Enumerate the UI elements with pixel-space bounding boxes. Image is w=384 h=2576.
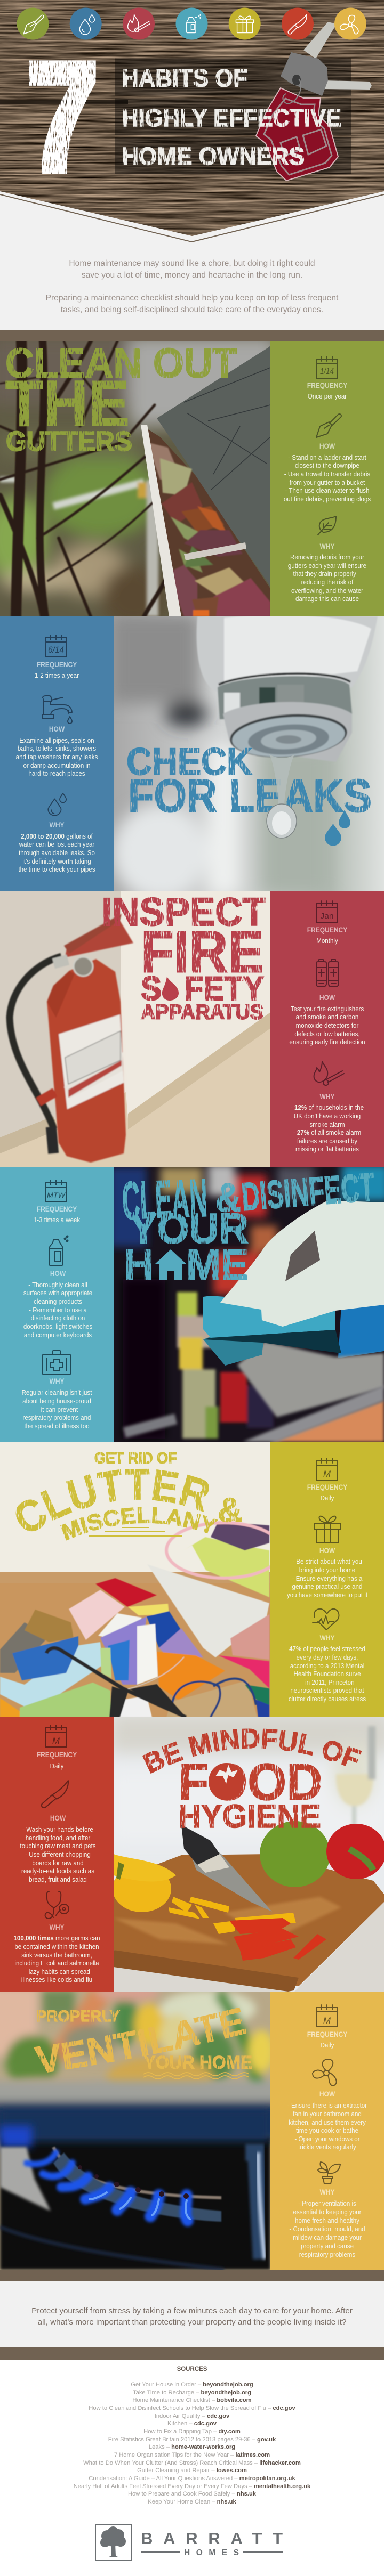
icon: calendar M [45, 1725, 67, 1748]
text: how [287, 1557, 367, 1599]
label: how: HOW [319, 2090, 335, 2098]
sources list: Condensation: A Guide – All Your Questions Answered – metropolitan.org.uk [89, 2475, 295, 2482]
text: why: Health Foundation surve [293, 1670, 361, 1678]
title text [122, 64, 341, 170]
title: get rid of clutter and miscellany: & [218, 1491, 242, 1529]
photo: pile of clutter [0, 1442, 282, 1717]
icon: flame and match [314, 1061, 345, 1086]
text: how: disinfecting cloth on [31, 1314, 85, 1322]
text: how: or damp accumulation in [23, 761, 91, 769]
closing text: all, what’s more important than protecting your property and the people living inside it? [38, 2318, 346, 2327]
text: how: and tap washers for any leaks [16, 753, 98, 761]
icon: knife [41, 1780, 69, 1808]
icon: knife [282, 7, 314, 39]
icon: potted plant [317, 2161, 341, 2184]
text: why: gutters each year will ensure [288, 562, 366, 570]
logo wordmark: BARRATT [141, 2529, 283, 2548]
divider strip [0, 330, 384, 341]
title text: HABITS OF [122, 64, 247, 92]
text: why [13, 1934, 100, 1984]
text: frequency value: 1-3 times a week [34, 1216, 80, 1224]
big numeral 7: 7 [27, 31, 98, 203]
icon: tap [42, 695, 73, 724]
text: how: surfaces with appropriate [23, 1289, 92, 1297]
text: why: - 27% of all smoke alarm [293, 1128, 361, 1136]
intro text: tasks, and being self-disciplined should take care of the everyday ones. [61, 305, 323, 314]
text: why: water can be lost each year [19, 840, 94, 848]
text: why: sink versus the bathroom, [21, 1951, 92, 1959]
text: why: including E coli and salmonella [14, 1959, 99, 1967]
text: why: be contained within the kitchen [14, 1943, 99, 1951]
label: frequency: FREQUENCY [307, 2030, 347, 2038]
label: how: HOW [319, 994, 335, 1002]
text: why: 47% of people feel stressed [289, 1645, 365, 1653]
text: how: hard-to-reach places [28, 769, 85, 777]
text: how [284, 453, 371, 503]
title: be mindful of food hygiene: BE MINDFUL OF [142, 1728, 362, 1774]
text: how: time you cook or bathe [296, 2126, 358, 2134]
sources list: 7 Home Organisation Tips for the New Year – latimes.com [114, 2452, 270, 2458]
sources list: Indoor Air Quality – cdc.gov [155, 2413, 229, 2419]
text: why: Removing debris from your [290, 553, 364, 561]
title: be mindful of food hygiene: FOOD [178, 1753, 323, 1811]
text: why: 100,000 times more germs can [13, 1934, 100, 1942]
title text: HOME OWNERS [122, 142, 305, 170]
label: frequency: FREQUENCY [307, 1483, 347, 1491]
logo: Barratt Homes [94, 2523, 285, 2562]
icon: first aid kit [42, 1350, 71, 1375]
sources list: Leaks – home-water-works.org [149, 2444, 235, 2450]
panel: gutters facts [270, 341, 384, 616]
text: why: - 12% of households in the [291, 1103, 364, 1111]
text: how [289, 1005, 365, 1046]
text: why: smoke alarm [309, 1120, 345, 1128]
icon: spray bottle [49, 1235, 68, 1266]
text: how: genuine practical use and [292, 1582, 362, 1590]
title: inspect fire safety apparatus: SAFETY [141, 970, 264, 1007]
title: clean and disinfect your home: & [215, 1175, 241, 1221]
text: why: that they drain properly – [293, 570, 361, 578]
section 1: clean out the gutters [0, 341, 384, 616]
label: how: HOW [319, 1546, 335, 1555]
icon: fan [311, 2058, 338, 2087]
text: how [16, 736, 98, 777]
photo: pan on gas burner [0, 1984, 283, 2270]
label: frequency: FREQUENCY [37, 1205, 77, 1213]
text: why: it’s definitely worth taking [22, 857, 91, 865]
icon: batteries [316, 959, 339, 987]
closing band [0, 2270, 384, 2360]
title: get rid of clutter and miscellany: CLUTTER [16, 1468, 209, 1531]
icon: spray bottle [176, 7, 208, 39]
text: why: according to a 2013 Mental [290, 1661, 364, 1670]
text: why: - Condensation, mould, and [289, 2225, 365, 2233]
photo: dripping tap [109, 613, 384, 900]
text: why: - Proper ventilation is [298, 2199, 356, 2207]
section 2: check for leaks [0, 616, 384, 891]
text: how: Test your fire extinguishers [291, 1005, 364, 1013]
sources heading: SOURCES [177, 2366, 207, 2372]
label: how: HOW [49, 725, 65, 733]
icon: calendar M: M [323, 1468, 331, 1479]
habit icon row [17, 7, 366, 39]
text: how: and computer keyboards [24, 1331, 92, 1339]
icon: trowel [316, 413, 342, 438]
text: how: - Ensure everything has a [292, 1574, 362, 1582]
title: inspect fire safety apparatus: APPARATUS [141, 1001, 263, 1024]
sources list: Keep Your Home Clean – nhs.uk [148, 2499, 236, 2505]
title: clean and disinfect your home: HOME [124, 1241, 249, 1289]
label: why: WHY [319, 542, 335, 550]
title text: HIGHLY EFFECTIVE [122, 104, 341, 132]
text: why [289, 1645, 366, 1703]
icon: calendar 1/14: 1/14 [320, 365, 334, 376]
panel: cleaning facts [0, 1167, 114, 1442]
text: how: out fine debris, preventing clogs [284, 495, 371, 503]
icon: fan [334, 7, 366, 39]
section 4: clean and disinfect [0, 1167, 384, 1442]
logo wordmark [141, 2529, 283, 2557]
text: frequency value: Daily [50, 1762, 63, 1770]
sources list: Fire Statistics Great Britain 2012 to 2013 pages 29-36 – gov.uk [108, 2436, 276, 2443]
page background band [0, 181, 384, 330]
label: why: WHY [49, 821, 65, 829]
sources list [0, 2381, 384, 2506]
title: inspect fire safety apparatus [101, 890, 266, 1024]
label: frequency: FREQUENCY [307, 926, 347, 934]
icon: calendar M: M [323, 2016, 331, 2026]
label: frequency: FREQUENCY [307, 381, 347, 389]
title: properly ventilate your home: YOUR HOME [144, 2052, 252, 2073]
title: check for leaks: CHECK [126, 741, 252, 783]
text: why: missing or flat batteries [295, 1145, 359, 1153]
icon: calendar MTW [45, 1180, 67, 1202]
section 5: clutter [0, 1442, 384, 1717]
logo wordmark: HOMES [184, 2548, 239, 2557]
text: why: overflowing, and the water [291, 587, 363, 595]
icon: calendar 6/14: 6/14 [48, 645, 64, 655]
sources list: Get Your House in Order – beyondthejob.org [131, 2382, 253, 2388]
text: frequency value: Daily [321, 2041, 334, 2049]
text: how: doorknobs, light switches [23, 1322, 92, 1330]
text: why [288, 553, 366, 603]
text: how [20, 1825, 96, 1883]
text: why: 2,000 to 20,000 gallons of [21, 832, 93, 840]
text: how: you have somewhere to put it [287, 1591, 367, 1599]
icon: leaf [317, 516, 337, 535]
text: why: – it can prevent [36, 1405, 78, 1413]
sources list: How to Fix a Dripping Tap – diy.com [143, 2428, 241, 2435]
text: how: - Wash your hands before [22, 1825, 93, 1833]
panel: fire safety facts [270, 891, 384, 1167]
sources list: Kitchen – cdc.gov [167, 2420, 217, 2427]
icon: calendar 1/14 [316, 356, 338, 379]
photo: fire extinguisher [0, 891, 270, 1167]
text: how: - Be strict about what you [292, 1557, 362, 1565]
text: why [22, 1388, 92, 1430]
text: how: trickle vents regularly [298, 2143, 356, 2151]
text: why: Regular cleaning isn’t just [22, 1388, 92, 1396]
text: how: boards for raw and [32, 1859, 84, 1867]
closing text [0, 2281, 384, 2347]
icon: calendar MTW: MTW [47, 1190, 66, 1199]
icon: water drops [70, 7, 102, 39]
icon: calendar Jan [316, 900, 338, 923]
sources list: Gutter Cleaning and Repair – lowes.com [137, 2467, 247, 2474]
photo: gloved hand with sponge [109, 1164, 384, 1442]
title: properly ventilate your home: VENTILATE [33, 2008, 246, 2073]
text: why: property and cause [301, 2242, 354, 2250]
title: get rid of clutter and miscellany: MISCELLANY [60, 1507, 219, 1541]
text: how: closest to the downpipe [295, 461, 359, 469]
text: why: clutter directly causes stress [289, 1695, 366, 1703]
text: how: touching raw meat and pets [20, 1842, 96, 1850]
icon: heart with pulse [312, 1608, 339, 1630]
label: how: HOW [319, 442, 335, 450]
label: why: WHY [319, 1093, 335, 1101]
text: why: through avoidable leaks. So [19, 849, 95, 857]
text: how: - Stand on a ladder and start [288, 453, 366, 461]
text: frequency value: Daily [321, 1494, 334, 1502]
label: how: HOW [50, 1814, 66, 1822]
title: properly ventilate your home: PROPERLY [36, 2008, 120, 2025]
sources list: Nearly Half of Adults Feel Stressed Every Day or Every Few Days – mentalhealth.org.uk [74, 2483, 310, 2490]
icon: calendar Jan: Jan [320, 912, 334, 921]
section 7: ventilate [0, 1992, 384, 2270]
text: how: Examine all pipes, seals on [19, 736, 94, 744]
photo: chopping board with peppers [109, 1713, 384, 1992]
title dark boxes [115, 59, 351, 174]
text: how: - Ensure there is an extractor [287, 2101, 367, 2109]
photo: roof gutter with leaves [0, 336, 277, 629]
text: how: - Use different chopping [25, 1850, 91, 1858]
text: how: - Remember to use a [29, 1306, 87, 1314]
header: wood banner [0, 0, 384, 242]
text: how: cleaning products [34, 1297, 82, 1305]
icon: gift [229, 7, 261, 39]
panel: food hygiene facts [0, 1717, 114, 1992]
logo box with tree [95, 2524, 132, 2561]
icon: trowel [17, 7, 49, 39]
text: why: failures are caused by [297, 1137, 357, 1145]
text: why: the spread of illness too [24, 1422, 90, 1430]
icon: drops [47, 793, 67, 816]
icon: calendar M [316, 1458, 338, 1481]
text: why: essential to keeping your [293, 2208, 361, 2216]
icon: calendar M [316, 2004, 338, 2027]
panel: clutter facts [270, 1442, 384, 1717]
icon: flame and match [123, 7, 155, 39]
text: frequency value: Once per year [308, 392, 347, 400]
title: clean and disinfect your home: YOUR [130, 1205, 249, 1252]
text: why: neuroscientists proved that [290, 1686, 364, 1694]
text: how: ensuring early fire detection [289, 1038, 365, 1046]
wood texture background [0, 0, 384, 245]
text: how: from your gutter to a bucket [290, 478, 365, 486]
text: how: kitchen, and use them every [289, 2118, 366, 2126]
text: how: - Use a trowel to transfer debris [284, 470, 370, 478]
label: why: WHY [49, 1377, 65, 1385]
text: how: bring into your home [299, 1566, 355, 1574]
title: get rid of clutter and miscellany: GET RID OF [94, 1450, 177, 1467]
icon: gift [314, 1515, 341, 1543]
panel: ventilation facts [270, 1992, 384, 2270]
sources list: How to Prepare and Cook Food Safely – nhs.uk [128, 2491, 256, 2497]
icon: stethoscope [45, 1891, 69, 1919]
text: why: damage this can cause [295, 595, 359, 603]
intro text [46, 259, 338, 314]
icon: calendar 6/14 [45, 635, 67, 657]
text: frequency value: Monthly [316, 937, 338, 945]
sources list: Take Time to Recharge – beyondthejob.org [133, 2390, 251, 2396]
text: how: handling food, and after [26, 1834, 90, 1841]
intro text: save you a lot of time, money and heartache in the long run. [82, 271, 302, 279]
text: how: defects or low batteries, [294, 1030, 360, 1038]
title: clean and disinfect your home [121, 1165, 376, 1289]
text: why [291, 1103, 364, 1153]
title: be mindful of food hygiene [142, 1728, 362, 1834]
text: how: - Then use clean water to flush [285, 486, 370, 494]
sources list: How to Clean and Disinfect Schools to Help Slow the Spread of Flu – cdc.gov [89, 2405, 295, 2411]
chevron line [0, 194, 384, 242]
closing text: Protect yourself from stress by taking a few minutes each day to care for your home. After [31, 2306, 353, 2315]
text: why: illnesses like colds and flu [21, 1976, 92, 1984]
text: why: mildew can damage your [293, 2233, 362, 2241]
text: why: – lazy habits can spread [23, 1968, 90, 1976]
text: how: baths, toilets, sinks, showers [18, 744, 96, 752]
title: clean out the gutters [5, 339, 237, 457]
title: check for leaks [126, 741, 372, 846]
text: how: monoxide detectors for [296, 1021, 358, 1029]
title: be mindful of food hygiene: HYGIENE [178, 1798, 321, 1834]
icon: house keys [256, 22, 372, 181]
intro text: Home maintenance may sound like a chore, but doing it right could [69, 259, 315, 268]
section 3: fire safety [0, 891, 384, 1167]
label: how: HOW [50, 1270, 66, 1278]
text: how: ready-to-eat foods such as [21, 1867, 94, 1875]
text: why: about being house-proud [22, 1397, 91, 1405]
icon: calendar M: M [52, 1736, 60, 1746]
text: why: reducing the risk of [301, 578, 353, 586]
label: frequency: FREQUENCY [37, 661, 77, 669]
text: why: every day or few days, [297, 1653, 358, 1661]
text: frequency value: 1-2 times a year [35, 671, 79, 679]
intro text: Preparing a maintenance checklist should help you keep on top of less frequent [46, 294, 338, 303]
text: how: bread, fruit and salad [29, 1875, 87, 1883]
text: how: and smoke and carbon [296, 1013, 358, 1021]
text: why: the time to check your pipes [18, 865, 95, 873]
label: why: WHY [319, 1634, 335, 1642]
sources list: What to Do When Your Clutter (And Stress) Reach Critical Mass – lifehacker.com [83, 2460, 301, 2466]
text: how: - Thoroughly clean all [28, 1281, 87, 1289]
text: why [277, 2199, 378, 2259]
title: clean out the gutters: THE [5, 367, 130, 440]
sources list: Home Maintenance Checklist – bobvila.com [132, 2397, 252, 2403]
text: why: UK don’t have a working [294, 1112, 361, 1120]
text: how: - Open your windows or [294, 2135, 360, 2143]
text: how [23, 1281, 92, 1339]
sources [0, 2364, 384, 2516]
text: how: fan in your bathroom and [293, 2110, 362, 2118]
panel: leaks facts [0, 616, 114, 891]
section 6: food hygiene [0, 1717, 384, 1992]
text: why: home fresh and healthy [295, 2216, 359, 2224]
text: why: – in 2011, Princeton [300, 1678, 355, 1686]
text: why: respiratory problems and [23, 1413, 91, 1421]
text: why [18, 832, 95, 873]
label: why: WHY [319, 2188, 335, 2196]
text: how [277, 2101, 378, 2151]
title: clean out the gutters: GUTTERS [6, 426, 132, 457]
label: why: WHY [49, 1923, 65, 1931]
text: why: respiratory problems [299, 2250, 355, 2258]
label: frequency: FREQUENCY [37, 1751, 77, 1759]
